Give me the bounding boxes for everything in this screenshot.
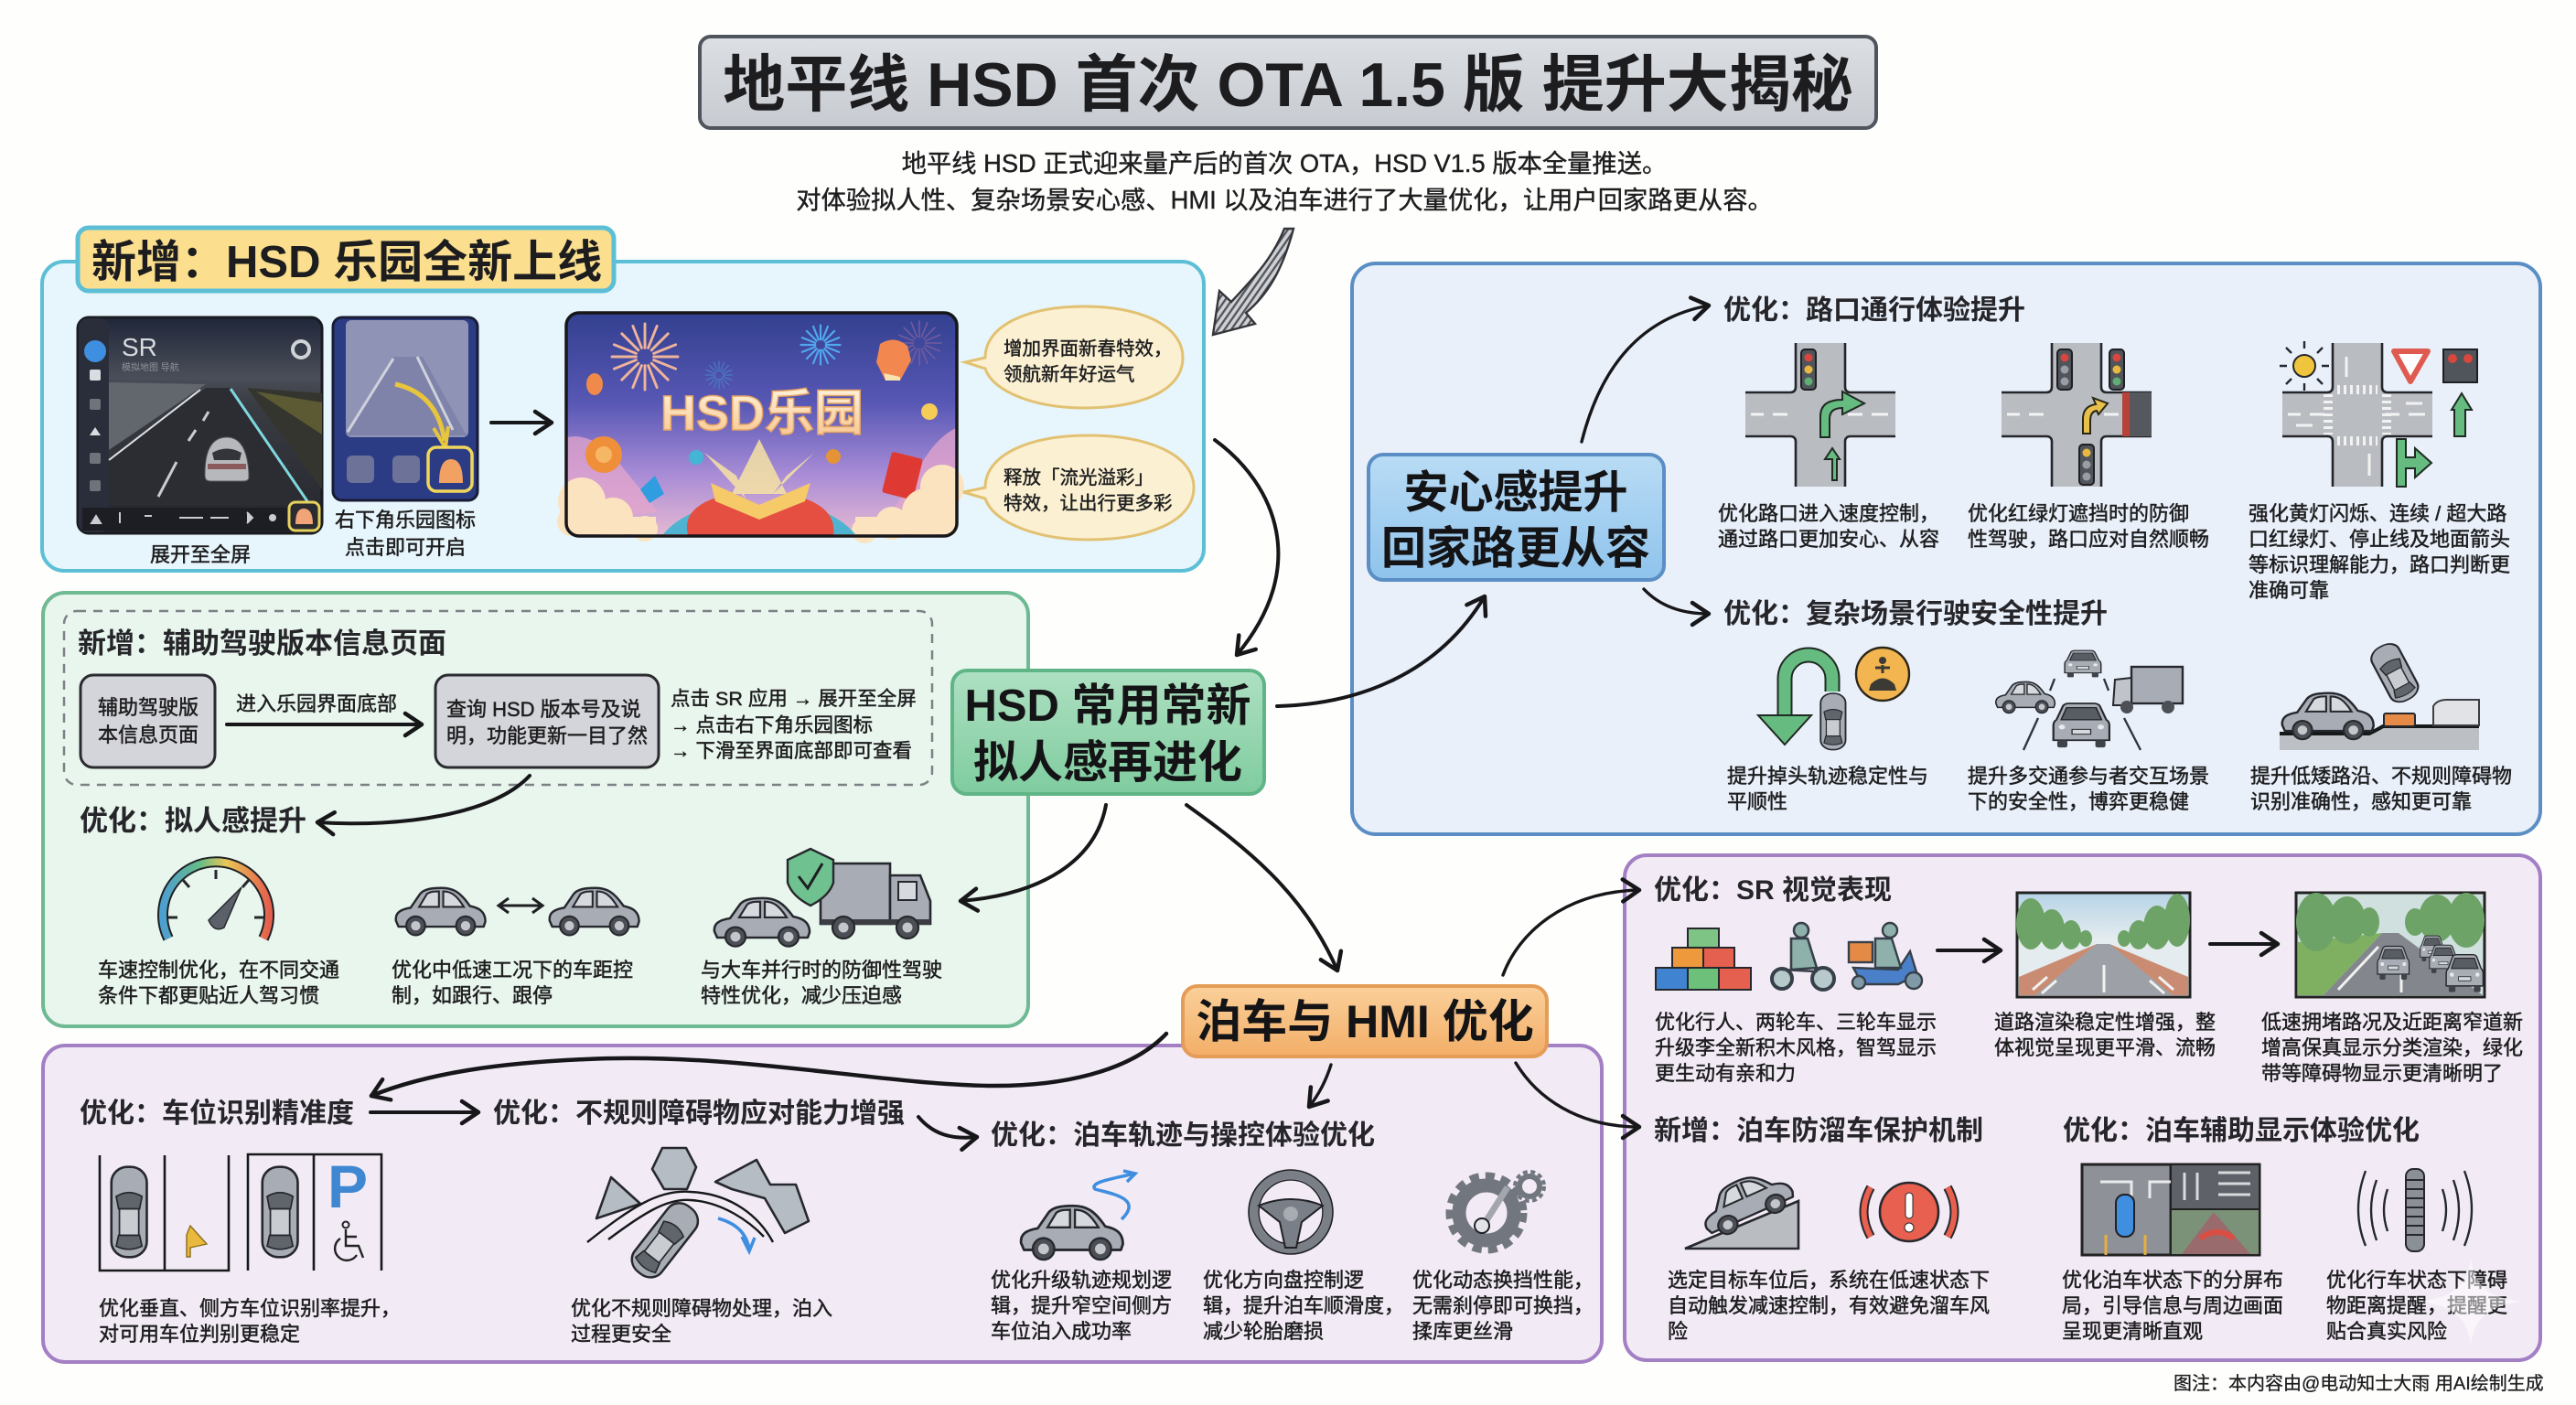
arrow: to scene 1 (1937, 949, 2001, 952)
heading: 路口通行: 优化：路口通行体验提升 (1723, 295, 2025, 326)
caption: 车速控制: 条件下都更贴近人驾习惯 (98, 984, 319, 1007)
caption: 障碍物距离提醒 (2326, 1269, 2507, 1343)
caption: 车位识别 (99, 1297, 401, 1346)
icon: intersection 3 with signs (2280, 341, 2477, 487)
caption: 高保真: 低速拥堵路况及近距离窄道新 (2261, 1011, 2523, 1034)
label: 进入乐园界面底部: 进入乐园界面底部 (236, 692, 397, 715)
caption: 低矮路沿: 识别准确性，感知更可靠 (2250, 790, 2472, 813)
dashed box: 版本信息页面 (64, 611, 932, 785)
callout: 流光溢彩 (963, 435, 1194, 540)
caption: 高保真: 增高保真显示分类渲染，绿化 (2261, 1036, 2523, 1059)
panel: 安心感 (1352, 263, 2540, 834)
icon: two cars gap (396, 888, 639, 935)
caption: 展开至全屏: 展开至全屏 (150, 543, 251, 566)
box: 查询 HSD 版本号 (435, 675, 659, 767)
caption: 方向盘: 减少轮胎磨损 (1203, 1320, 1324, 1343)
screen: 全屏 SR 界面 (78, 317, 322, 533)
caption: 车位识别: 对可用车位判别更稳定 (99, 1323, 300, 1346)
caption: 高保真 (2261, 1011, 2523, 1085)
icon: car with path (1021, 1171, 1135, 1260)
icon: parking spot 2: P (327, 1153, 368, 1220)
caption: 换挡: 无需刹停即可换挡， (1412, 1294, 1594, 1317)
caption: 防溜车: 自动触发减速控制，有效避免溜车风 (1668, 1294, 1990, 1317)
heading: 泊车轨迹: 优化：泊车轨迹与操控体验优化 (991, 1121, 1375, 1151)
icon: sensor waves (2358, 1169, 2472, 1251)
panel: 泊车 left (43, 1046, 1602, 1362)
icon: split parking view (2082, 1164, 2259, 1255)
arrow: 障碍物 to 轨迹 (918, 1117, 977, 1138)
caption: 多交通参与者 (1968, 765, 2209, 813)
caption: 防御性驾驶: 特性优化，减少压迫感 (701, 984, 902, 1007)
caption: 低矮路沿: 提升低矮路沿、不规则障碍物 (2250, 765, 2512, 788)
caption: 右下角乐园图标: 点击即可开启 (345, 536, 466, 559)
caption: 方向盘: 辑，提升泊车顺滑度， (1203, 1294, 1404, 1317)
icon: speedometer (163, 862, 269, 938)
caption: 方向盘 (1203, 1269, 1404, 1343)
caption: 障碍物处理 (571, 1297, 832, 1346)
caption: 障碍物距离提醒: 物距离提醒，提醒更 (2326, 1294, 2507, 1317)
arrow: to 拟人感提升 (317, 776, 530, 823)
callout: 新春特效: 增加界面新春特效， (1004, 338, 1173, 359)
box: 查询 HSD 版本号: 查询 HSD 版本号及说 (446, 698, 641, 721)
icon: intersection 2 (2002, 343, 2152, 487)
caption: 分屏布局: 局，引导信息与周边画面 (2062, 1294, 2283, 1317)
icon: blocks (1656, 928, 1751, 990)
arrow: 常用常新 to 防御驾驶 (961, 805, 1106, 901)
caption: 积木风格: 更生动有亲和力 (1655, 1062, 1796, 1085)
icon: parking spot 2 (248, 1153, 381, 1271)
image: road scene 2 (2296, 893, 2485, 997)
node: HSD 常用常新: 拟人感再进化 (973, 738, 1242, 788)
arrow: 常用常新 to 安心感 (1277, 596, 1485, 706)
caption: 高保真: 带等障碍物显示更清晰明了 (2261, 1062, 2503, 1085)
caption: 障碍物距离提醒: 优化行车状态下障碍 (2326, 1269, 2507, 1292)
caption: 换挡 (1412, 1269, 1594, 1343)
icon: steering wheel (1249, 1170, 1333, 1254)
subtitle (796, 149, 1773, 214)
node: HSD 常用常新 (952, 670, 1264, 794)
steps text (671, 688, 917, 762)
caption: 分屏布局: 优化泊车状态下的分屏布 (2062, 1269, 2283, 1292)
steps text: → 下滑至界面底部即可查看 (671, 740, 912, 762)
caption: 多交通参与者: 提升多交通参与者交互场景 (1968, 765, 2209, 788)
caption: 轨迹规划: 车位泊入成功率 (991, 1320, 1132, 1343)
image: road scene 1 (2016, 893, 2190, 997)
callout: 流光溢彩: 特效，让出行更多彩 (1004, 493, 1173, 514)
caption: 积木风格 (1655, 1011, 1937, 1085)
caption: 积木风格: 升级李全新积木风格，智驾显示 (1655, 1036, 1937, 1059)
box: 辅助驾驶版本信息页面: 本信息页面 (98, 724, 199, 746)
caption: 道路渲染 (1994, 1011, 2216, 1059)
callout: 流光溢彩: 释放「流光溢彩」 (1004, 467, 1154, 488)
caption: 黄灯闪烁: 口红绿灯、停止线及地面箭头 (2249, 528, 2510, 551)
icon: parking spot 1 (100, 1155, 229, 1271)
node: 泊车与 HMI 优化: 泊车与 HMI 优化 (1196, 996, 1534, 1047)
arrow: 泊车 to SR (1503, 890, 1639, 975)
caption: 换挡: 揉库更丝滑 (1412, 1320, 1513, 1343)
caption: 防溜车: 选定目标车位后，系统在低速状态下 (1668, 1269, 1990, 1292)
screen: 右下角乐园图标 (333, 317, 478, 500)
caption: 换挡: 优化动态换挡性能， (1412, 1269, 1594, 1292)
caption: 障碍物处理: 优化不规则障碍物处理，泊入 (571, 1297, 832, 1320)
heading: 辅助驾驶版本信息页面: 新增：辅助驾驶版本信息页面 (78, 627, 446, 660)
caption: 防溜车 (1668, 1269, 1990, 1343)
box: 辅助驾驶版本信息页面: 辅助驾驶版 (98, 696, 199, 719)
caption: 路口进入速度: 通过路口更加安心、从容 (1718, 528, 1939, 551)
heading: 拟人感提升: 优化：拟人感提升 (80, 805, 306, 837)
icon: multi traffic (1996, 650, 2183, 750)
HSD 乐园 splash image (557, 313, 964, 543)
node: 泊车与 HMI 优化 (1183, 986, 1547, 1056)
caption: 红绿灯遮挡 (1968, 502, 2209, 551)
caption: 车位识别: 优化垂直、侧方车位识别率提升， (99, 1297, 401, 1320)
caption: 障碍物处理: 过程更安全 (571, 1323, 671, 1346)
caption: 车距控制: 制，如跟行、跟停 (392, 984, 553, 1007)
heading: 不规则障碍物: 优化：不规则障碍物应对能力增强 (493, 1099, 905, 1129)
caption: 轨迹规划: 优化升级轨迹规划逻 (991, 1269, 1172, 1292)
caption: 车速控制 (98, 959, 339, 1007)
caption: 车速控制: 车速控制优化，在不同交通 (98, 959, 339, 981)
arrow: subtitle to HSD 乐园 panel (1213, 229, 1293, 335)
caption: 车距控制: 优化中低速工况下的车距控 (392, 959, 633, 981)
caption: 道路渲染: 道路渲染稳定性增强，整 (1994, 1011, 2216, 1034)
steps text: 点击 SR 应用 → 展开至全屏 (671, 688, 917, 710)
caption: 障碍物距离提醒: 贴合真实风险 (2326, 1320, 2447, 1343)
arrow: 安心感 to 复杂场景 (1644, 589, 1709, 614)
node: 安心感提升: 安心感提升 (1403, 468, 1628, 518)
caption: 黄灯闪烁: 强化黄灯闪烁、连续 / 超大路 (2249, 502, 2506, 525)
box: 辅助驾驶版本信息页面 (80, 675, 215, 767)
icon: three-wheeler rider (1849, 923, 1922, 989)
heading: 复杂场景: 优化：复杂场景行驶安全性提升 (1723, 599, 2108, 629)
caption: 防溜车: 险 (1668, 1320, 1688, 1343)
box: 查询 HSD 版本号: 明，功能更新一目了然 (446, 724, 648, 747)
subtitle: 地平线 HSD 正式迎来量产后的首次 OTA，HSD V1.5 版本全量推送。 (902, 149, 1667, 177)
screen: 全屏 SR 界面: 模拟地图 导航 (122, 361, 179, 373)
caption: 低矮路沿 (2250, 765, 2512, 813)
node: 安心感提升 (1368, 455, 1664, 580)
arrow: 安心感 to 路口 (1582, 306, 1709, 442)
panel: 泊车 right (1625, 855, 2540, 1360)
caption: 掉头 (1727, 765, 1928, 813)
arrow: to HSD 乐园 image (491, 421, 552, 424)
caption: 红绿灯遮挡: 性驾驶，路口应对自然顺畅 (1968, 528, 2209, 551)
title: 地平线 HSD 首次 OTA 1.5 版 提升大揭秘 (723, 50, 1853, 120)
callout: 新春特效 (965, 306, 1183, 408)
panel: 拟人感 (43, 593, 1028, 1026)
caption: 防御性驾驶: 与大车并行时的防御性驾驶 (701, 959, 942, 981)
arrow: 常用常新 to 泊车 (1186, 805, 1337, 971)
heading: SR 视觉表现: 优化：SR 视觉表现 (1654, 875, 1892, 906)
caption: 轨迹规划: 辑，提升窄空间侧方 (991, 1294, 1172, 1317)
arrow: to 查询 (227, 723, 422, 726)
caption: 掉头: 平顺性 (1727, 790, 1787, 813)
heading: 泊车辅助显示: 优化：泊车辅助显示体验优化 (2063, 1116, 2420, 1146)
caption: 黄灯闪烁: 等标识理解能力，路口判断更 (2249, 553, 2510, 576)
caption: 分屏布局: 呈现更清晰直观 (2062, 1320, 2203, 1343)
screen: 全屏 SR 界面: SR (122, 333, 157, 361)
caption: 红绿灯遮挡: 优化红绿灯遮挡时的防御 (1968, 502, 2189, 525)
caption: 积木风格: 优化行人、两轮车、三轮车显示 (1655, 1011, 1937, 1034)
icon: gears (1450, 1172, 1544, 1249)
arrow: 泊车 to 车位 (371, 1034, 1166, 1096)
caption: 分屏布局 (2062, 1269, 2283, 1343)
icon: warning (1864, 1183, 1954, 1241)
caption: 路口进入速度: 优化路口进入速度控制， (1718, 502, 1939, 525)
caption: 防御性驾驶 (701, 959, 942, 1007)
icon: U-turn (1758, 648, 1909, 750)
arrow: 泊车 to 防溜车 (1516, 1063, 1639, 1127)
caption: 轨迹规划 (991, 1269, 1172, 1343)
watermark star (2421, 1259, 2520, 1345)
arrow: 泊车 to 轨迹 (1309, 1065, 1331, 1107)
caption: 黄灯闪烁 (2249, 502, 2510, 602)
caption: 道路渲染: 体视觉呈现更平滑、流畅 (1994, 1036, 2216, 1059)
heading: 车位识别: 优化：车位识别精准度 (80, 1098, 354, 1129)
heading tag: 新增 HSD 乐园: 新增：HSD 乐园全新上线 (91, 238, 602, 287)
caption: 右下角乐园图标 (335, 509, 476, 559)
caption: 方向盘: 优化方向盘控制逻 (1203, 1269, 1364, 1292)
icon: low curb (2280, 639, 2479, 750)
icon: intersection 1 (1745, 343, 1895, 487)
icon: car on slope (1685, 1163, 1798, 1249)
icon: irregular obstacles (587, 1148, 809, 1283)
panel: HSD 乐园 (42, 228, 1204, 571)
caption: 掉头: 提升掉头轨迹稳定性与 (1727, 765, 1928, 788)
subtitle: 对体验拟人性、复杂场景安心感、HMI 以及泊车进行了大量优化，让用户回家路更从容。 (796, 186, 1773, 214)
callout: 新春特效: 领航新年好运气 (1004, 364, 1134, 385)
steps text: → 点击右下角乐园图标 (671, 714, 873, 736)
caption: 多交通参与者: 下的安全性，博弈更稳健 (1968, 790, 2189, 813)
heading: 防溜车: 新增：泊车防溜车保护机制 (1654, 1116, 1983, 1146)
caption: 右下角乐园图标: 右下角乐园图标 (335, 509, 476, 531)
arrow: 车位 to 障碍物 (370, 1110, 478, 1114)
arrow: to scene 2 (2210, 942, 2278, 946)
caption: 车距控制 (392, 959, 633, 1007)
caption: 黄灯闪烁: 准确可靠 (2249, 579, 2329, 602)
icon: car beside truck with shield (714, 849, 930, 947)
node: 安心感提升: 回家路更从容 (1381, 524, 1650, 574)
node: HSD 常用常新: HSD 常用常新 (964, 681, 1251, 731)
footer note: 图注：本内容由@电动知士大雨 用AI绘制生成 (2174, 1373, 2544, 1394)
icon: two-wheeler rider (1772, 923, 1834, 990)
arrow: 乐园 to 常用常新 (1215, 440, 1278, 655)
HSD 乐园 splash image: HSD乐园 (660, 386, 864, 441)
caption: 路口进入速度 (1718, 502, 1939, 551)
